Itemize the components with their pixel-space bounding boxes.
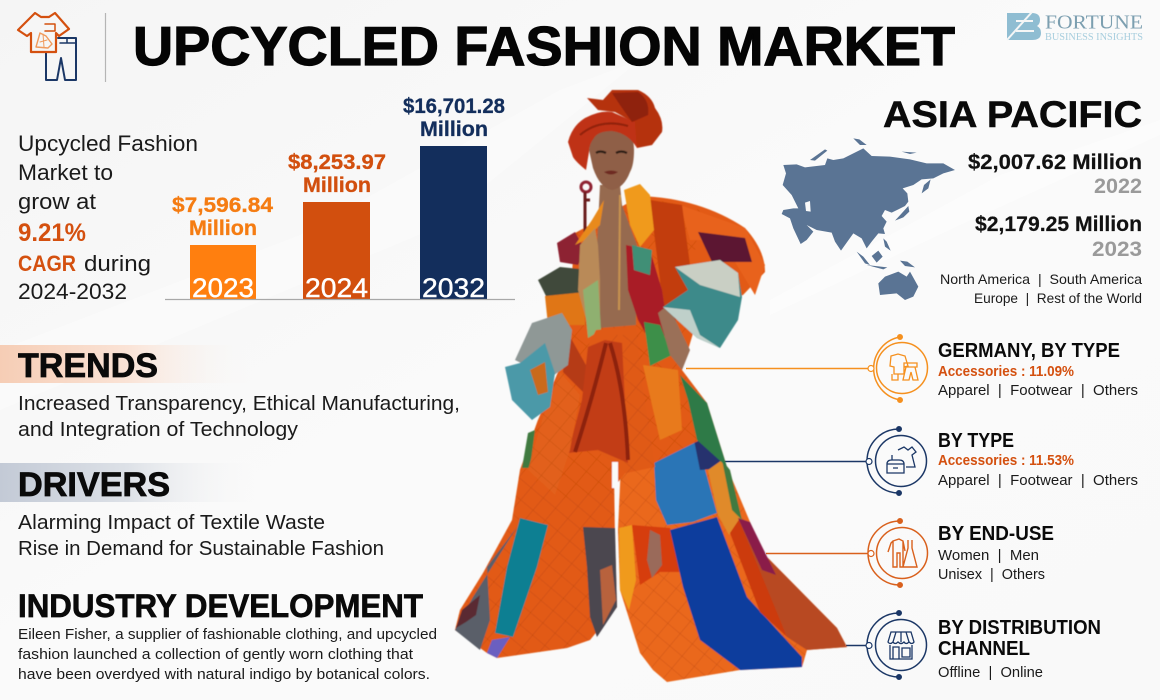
icon: clothing set xyxy=(868,334,928,402)
left leg of coat xyxy=(455,420,617,658)
turban xyxy=(568,90,662,170)
logo: Fortune Business Insights xyxy=(1007,12,1143,43)
text block: Asia Pacific values: $2,007.62 Million xyxy=(968,151,1142,174)
logo: Fortune Business Insights: BUSINESS INSIGHTS xyxy=(1045,32,1143,43)
bar 2024 xyxy=(288,151,386,303)
panel: trends: and Integration of Technology xyxy=(18,418,299,441)
segment: by distribution channel: Offline | Online xyxy=(938,664,1043,681)
panel: trends: Increased Transparency, Ethical Manufacturing, xyxy=(18,392,460,415)
bar 2024: $8,253.97 xyxy=(288,151,386,174)
segment: by distribution channel: BY DISTRIBUTION xyxy=(938,617,1101,639)
text block: CAGR summary: during xyxy=(84,251,151,276)
bar 2032: Million xyxy=(420,118,488,141)
coat lapels and floral strips xyxy=(575,184,727,467)
header icon: t-shirt and jeans xyxy=(18,13,76,80)
panel: drivers: DRIVERS xyxy=(18,466,170,504)
panel: drivers xyxy=(0,463,384,560)
text block: CAGR summary: CAGR xyxy=(18,251,76,276)
segment: Germany by type: Apparel | Footwear | Others xyxy=(938,382,1138,399)
text block: other regions: North America | South America xyxy=(940,271,1142,287)
earrings xyxy=(581,182,620,310)
text block: CAGR summary: 9.21% xyxy=(18,219,86,247)
text block: CAGR summary: 2024-2032 xyxy=(18,279,127,304)
segment: by distribution channel xyxy=(866,610,1101,681)
icon: suit and dress xyxy=(868,518,928,588)
bar chart: market size xyxy=(165,95,515,303)
face, neck and chest xyxy=(589,124,637,328)
bar 2032: 2032 xyxy=(422,273,485,303)
map: Asia Pacific xyxy=(782,138,955,300)
segment: by end-use: BY END-USE xyxy=(938,523,1054,545)
text block: other regions: Europe | Rest of the World xyxy=(974,290,1142,306)
segment: by end-use: Unisex | Others xyxy=(938,566,1045,583)
left cuff xyxy=(505,313,572,420)
bar 2023 xyxy=(172,194,273,303)
panel: industry development: have been overdyed with natural indigo by botanical colors. xyxy=(18,666,430,683)
bar 2023: Million xyxy=(189,217,257,240)
text block: other regions xyxy=(940,271,1142,306)
text block: CAGR summary: Upcycled Fashion xyxy=(18,131,198,156)
text block: Asia Pacific values: $2,179.25 Million xyxy=(975,213,1142,236)
segment: by type: Accessories : 11.53% xyxy=(938,453,1074,469)
text block: CAGR summary xyxy=(18,131,198,304)
bar 2024: 2024 xyxy=(305,273,368,303)
right leg of coat xyxy=(618,428,847,682)
panel: drivers: Alarming Impact of Textile Waste xyxy=(18,512,325,534)
segment: by end-use: Women | Men xyxy=(938,547,1039,564)
bar 2023: $7,596.84 xyxy=(172,194,273,217)
panel: trends xyxy=(0,345,460,441)
panel: industry development: INDUSTRY DEVELOPMENT xyxy=(18,588,423,624)
trousers and red sash xyxy=(528,326,655,495)
icon: shop front xyxy=(866,610,926,680)
coat body and sleeves xyxy=(520,196,765,500)
text block: CAGR summary: grow at xyxy=(18,189,96,214)
connector lines xyxy=(686,368,868,646)
bar 2024: Million xyxy=(303,174,371,197)
segment: by type: Apparel | Footwear | Others xyxy=(938,472,1138,489)
text block: Asia Pacific values: 2023 xyxy=(1092,238,1142,261)
bar 2023: 2023 xyxy=(192,273,254,303)
logo: Fortune Business Insights: FORTUNE xyxy=(1045,12,1143,34)
text block: Asia Pacific values xyxy=(968,151,1142,261)
bar 2032: $16,701.28 xyxy=(403,95,505,118)
text block: CAGR summary: Market to xyxy=(18,160,113,185)
right arm and cuff xyxy=(658,260,742,370)
panel: drivers: Rise in Demand for Sustainable Fashion xyxy=(18,538,384,560)
segment: Germany by type: GERMANY, BY TYPE xyxy=(938,340,1120,362)
panel: industry development xyxy=(18,588,437,683)
region heading: Asia Pacific: ASIA PACIFIC xyxy=(883,94,1142,135)
segment: by end-use xyxy=(868,518,1054,588)
segment: Germany by type xyxy=(868,334,1138,402)
bar 2032 xyxy=(403,95,505,303)
icon: bag and dress xyxy=(866,426,926,496)
segment: by type: BY TYPE xyxy=(938,430,1014,452)
segment: by distribution channel: CHANNEL xyxy=(938,638,1030,660)
title: UPCYCLED FASHION MARKET xyxy=(133,15,955,77)
panel: industry development: fashion launched a collection of gently worn clothing that xyxy=(18,646,414,663)
text block: Asia Pacific values: 2022 xyxy=(1094,175,1142,198)
figure: model in patchwork coat xyxy=(455,90,847,682)
panel: trends: TRENDS xyxy=(18,347,158,385)
panel: industry development: Eileen Fisher, a supplier of fashionable clothing, and upcycled xyxy=(18,626,437,643)
segment: by type xyxy=(866,426,1138,496)
segment: Germany by type: Accessories : 11.09% xyxy=(938,364,1074,380)
